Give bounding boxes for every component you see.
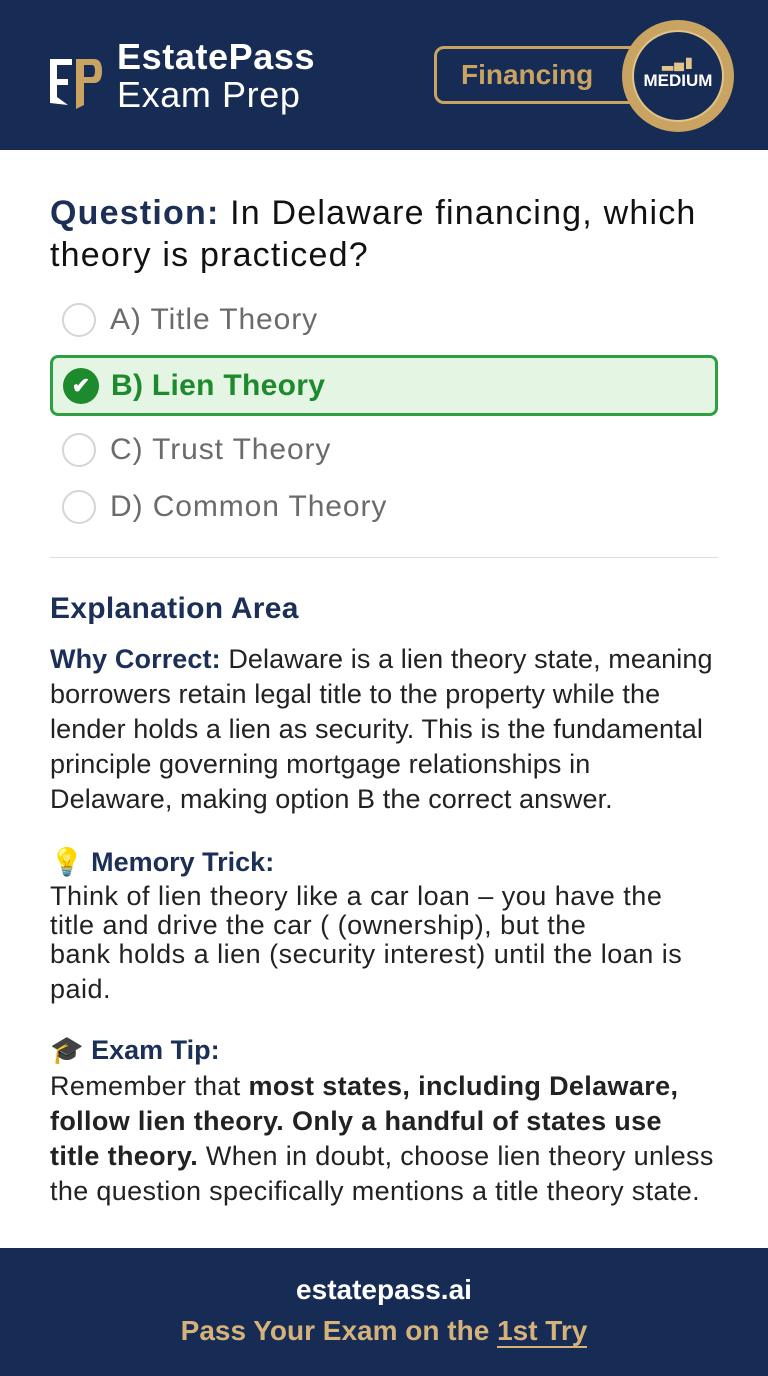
category badge: Financing [461,59,593,90]
question: Question: In Delaware financing, which [50,194,697,232]
question: theory is practiced? [50,236,369,274]
memory trick text [50,881,682,1004]
check icon: ✔ [72,372,90,398]
category badge [434,46,654,104]
exam tip text: the question specifically mentions a title theory state. [50,1176,700,1206]
option D: D) Common Theory [110,490,387,523]
option B correct: B) Lien Theory [111,368,325,402]
option C: C) Trust Theory [110,433,331,466]
why correct text [50,644,713,814]
exam tip text: follow lien theory. Only a handful of states use [50,1106,662,1136]
exam tip heading: 🎓 Exam Tip: [50,1035,220,1065]
memory trick text: title and drive the car ( (ownership), but the [50,910,586,940]
memory trick text: Think of lien theory like a car loan – you have the [50,881,662,911]
exam tip text: Remember that most states, including Delaware, [50,1071,678,1101]
header [0,0,768,150]
why correct text: borrowers retain legal title to the property while the [50,679,660,709]
difficulty seal: MEDIUM [644,71,712,90]
brand name: Exam Prep [117,74,300,115]
memory trick text: paid. [50,974,111,1004]
difficulty seal [622,20,734,132]
website: estatepass.ai [296,1274,472,1305]
logo icon [50,59,102,109]
why correct text: Delaware, making option B the correct answer. [50,784,613,814]
brand name: EstatePass [117,36,315,77]
difficulty seal: ▂▄▮ [662,54,694,70]
why correct text: principle governing mortgage relationships in [50,749,590,779]
option A: A) Title Theory [110,303,318,336]
exam tip text: title theory. When in doubt, choose lien theory unless [50,1141,714,1171]
tagline: Pass Your Exam on the 1st Try [181,1315,587,1346]
why correct text: Why Correct: Delaware is a lien theory state, meaning [50,644,713,674]
check icon [63,368,99,404]
explanation heading: Explanation Area [50,592,299,625]
exam tip text [50,1071,714,1206]
option B correct [50,355,718,416]
brand name [117,36,315,115]
memory trick heading: 💡 Memory Trick: [50,847,274,877]
why correct text: lender holds a lien as security. This is the fundamental [50,714,703,744]
question [50,194,697,274]
memory trick text: bank holds a lien (security interest) until the loan is [50,939,682,969]
footer [0,1248,768,1376]
